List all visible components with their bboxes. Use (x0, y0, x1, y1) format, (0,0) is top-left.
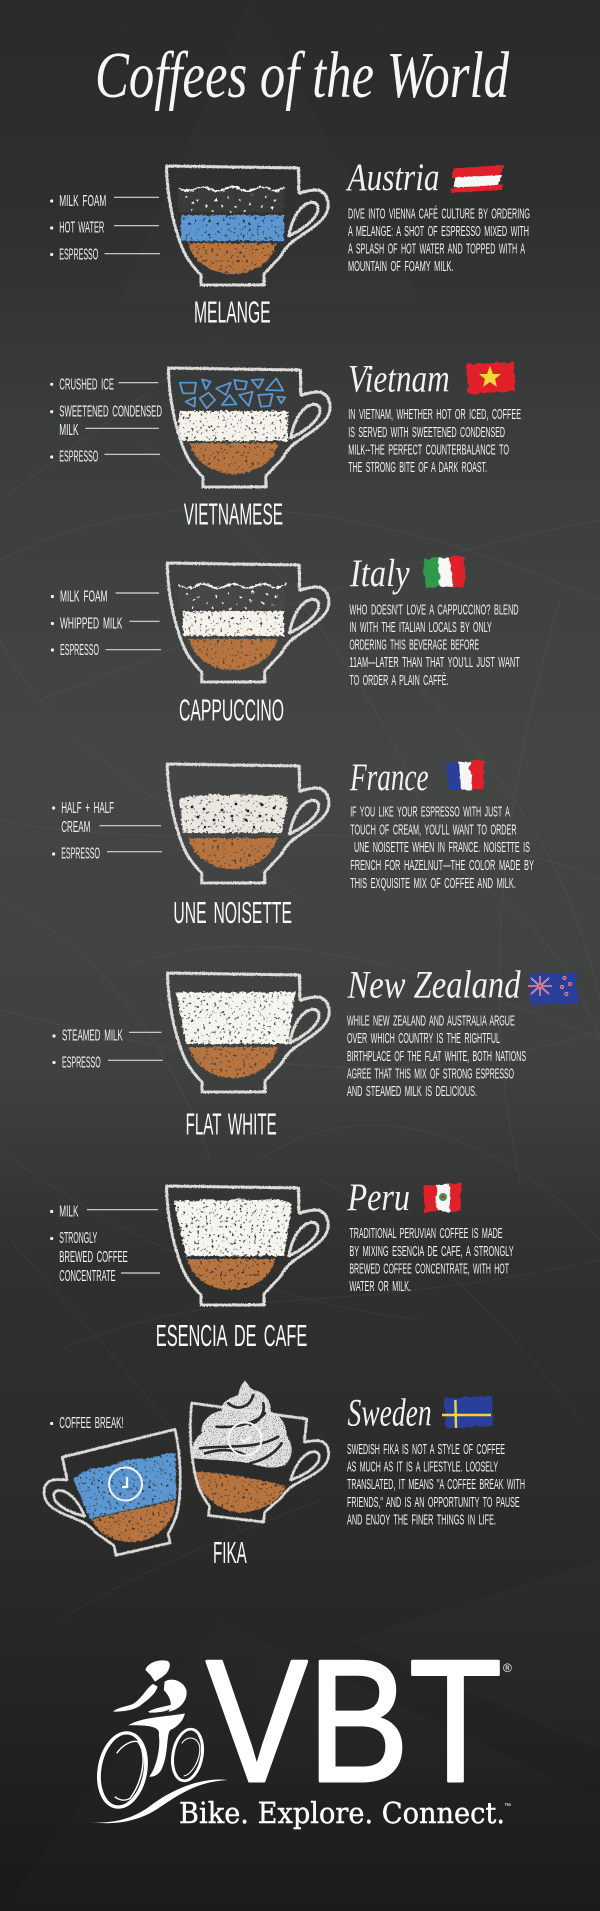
trademark mark: ™ (504, 1803, 511, 1810)
description: New Zealand: AND STEAMED MILK IS DELICIOUS. (347, 1084, 477, 1100)
panel: fika: COFFEE BREAK! (59, 1415, 124, 1432)
cup: esencia de cafe (166, 1186, 328, 1305)
description: Sweden (347, 1442, 525, 1528)
ingredient labels: cappuccino (51, 589, 161, 659)
ingredient labels: esencia de cafe: BREWED COFFEE (59, 1249, 128, 1266)
country heading: Italy: Italy (349, 552, 410, 595)
ingredient labels: une noisette (52, 800, 162, 863)
panel: vietnamese: SWEETENED CONDENSED (59, 403, 162, 420)
registered mark: ® (503, 1661, 512, 1675)
panel: fika: FIKA (213, 1535, 247, 1570)
panel: vietnamese: VIETNAMESE (184, 496, 283, 532)
wordmark: VBT (206, 1623, 502, 1818)
country heading: France: France (349, 756, 429, 799)
cup: whipped cream, tilted right (178, 1381, 333, 1529)
icon: Vietnam flag (466, 362, 515, 394)
panel: cappuccino (51, 552, 520, 728)
cup: melange (166, 166, 328, 285)
whipped cream swirl (192, 1381, 292, 1468)
drink name: esencia de cafe: ESENCIA DE CAFE (156, 1318, 307, 1353)
ingredient labels: flat white: STEAMED MILK (62, 1028, 123, 1045)
ingredient labels: une noisette: HALF + HALF (61, 800, 114, 817)
ingredient labels: melange: ESPRESSO (59, 246, 98, 263)
description: Vietnam (348, 407, 521, 476)
panel: melange (50, 156, 530, 330)
country heading: New Zealand: New Zealand (347, 963, 521, 1006)
ingredient labels: vietnamese: MILK (59, 422, 79, 439)
ingredient labels: melange: MILK FOAM (59, 193, 106, 210)
cup: vietnamese (168, 368, 330, 487)
cup: une noisette (167, 764, 329, 883)
ingredient labels: vietnamese: ESPRESSO (59, 449, 98, 466)
cup: cappuccino (167, 563, 329, 682)
ingredient label: coffee break (50, 1415, 124, 1432)
icon: Peru flag (423, 1183, 461, 1213)
country heading: Sweden: Sweden (348, 1392, 432, 1435)
panel: vietnamese (50, 358, 521, 532)
icon: clock on left cup (109, 1468, 142, 1500)
description: Austria (348, 206, 530, 275)
drink name: cappuccino: CAPPUCCINO (179, 692, 284, 728)
description: New Zealand (347, 1014, 526, 1100)
ingredient labels: une noisette: ESPRESSO (61, 846, 100, 863)
drink name: melange: MELANGE (194, 294, 271, 330)
country heading: Austria: Austria (345, 156, 440, 199)
country heading: Peru: Peru (347, 1176, 410, 1219)
panel: une noisette (52, 756, 534, 930)
icon: clock on right cup (228, 1422, 262, 1456)
ingredient labels: cappuccino: ESPRESSO (60, 642, 99, 659)
logo: VBT (82, 1623, 512, 1830)
description: Italy: TO ORDER A PLAIN CAFFÈ. (349, 672, 448, 689)
description: Italy (349, 602, 520, 689)
ingredient labels: une noisette: CREAM (61, 819, 90, 836)
icon: cyclist (82, 1660, 228, 1823)
ingredient labels: esencia de cafe: MILK (59, 1203, 79, 1220)
ingredient labels: cappuccino: MILK FOAM (60, 589, 108, 606)
icon: Italy flag (423, 556, 465, 589)
ingredient labels: melange: HOT WATER (59, 220, 104, 237)
country heading: Vietnam: Vietnam (348, 358, 450, 401)
icon: Austria flag (451, 165, 504, 193)
panel: flat white (52, 963, 578, 1142)
ingredient labels: cappuccino: WHIPPED MILK (60, 615, 123, 632)
ingredient labels: vietnamese: CRUSHED ICE (59, 376, 114, 393)
ingredient labels: vietnamese (50, 376, 162, 466)
ingredient labels: esencia de cafe: CONCENTRATE (59, 1268, 116, 1285)
panel: fika (36, 1381, 525, 1570)
panel: esencia de cafe (50, 1176, 514, 1353)
ingredient labels: flat white: ESPRESSO (62, 1054, 101, 1071)
icon: France flag (446, 760, 484, 790)
tagline: Bike. Explore. Connect. (179, 1796, 505, 1830)
description: Austria: MOUNTAIN OF FOAMY MILK. (348, 259, 454, 275)
ingredient labels: esencia de cafe: STRONGLY (59, 1230, 97, 1247)
ingredient labels: melange (50, 193, 160, 263)
crushed ice (180, 378, 285, 408)
cup: flat white (168, 973, 329, 1092)
description: Peru: WATER OR MILK. (349, 1279, 411, 1295)
cup: coffee break, tilted left (36, 1429, 200, 1568)
panel: flat white: FLAT WHITE (186, 1106, 277, 1142)
icon: New Zealand flag (528, 973, 578, 1005)
description: Peru (349, 1226, 514, 1295)
description: France (350, 804, 534, 892)
icon: Sweden flag (442, 1397, 493, 1428)
drink name: une noisette: UNE NOISETTE (173, 895, 292, 930)
ingredient labels: flat white (52, 1028, 163, 1071)
ingredient labels: esencia de cafe (50, 1203, 160, 1285)
